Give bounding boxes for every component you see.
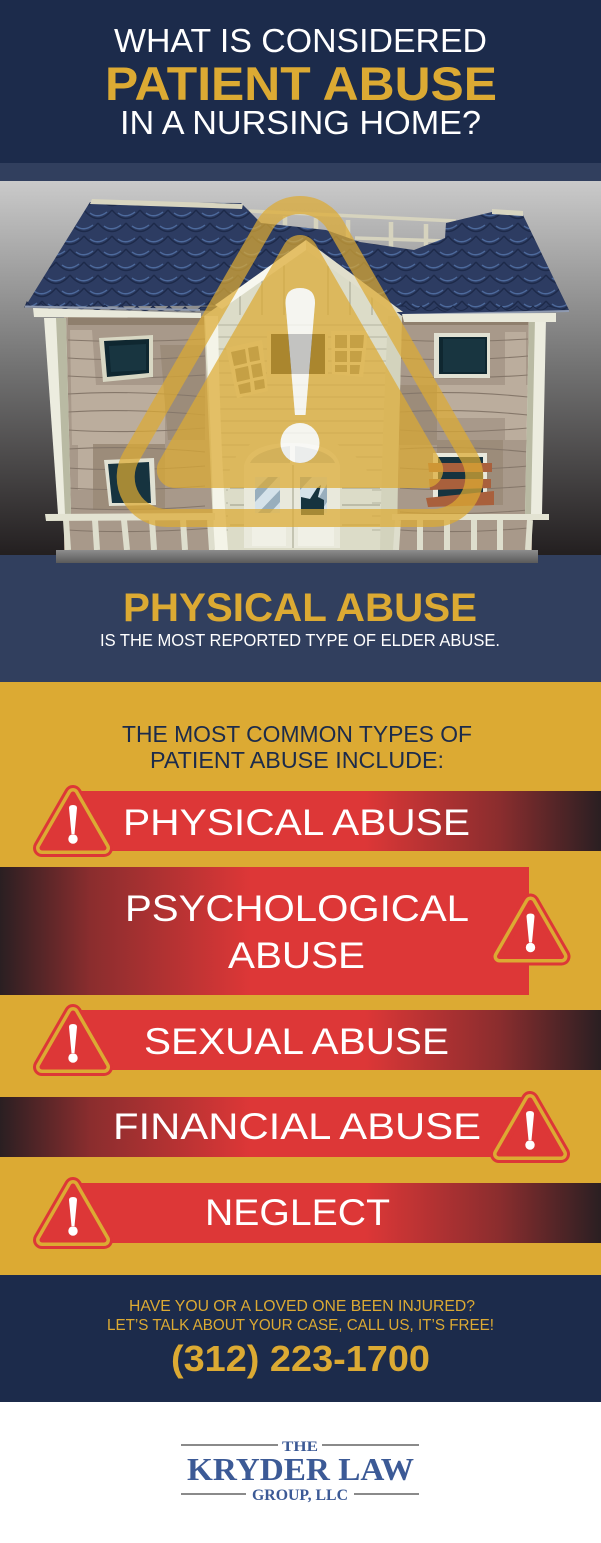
- title: WHAT IS CONSIDERED: [114, 22, 487, 59]
- logo: The Kryder Law Group: [181, 1439, 419, 1504]
- call to action text: [107, 1298, 494, 1334]
- porch balusters: [66, 520, 530, 550]
- call to action text: HAVE YOU OR A LOVED ONE BEEN INJURED?: [129, 1298, 475, 1315]
- logo: The Kryder Law Group: THE: [282, 1439, 318, 1455]
- title: PATIENT ABUSE: [105, 57, 497, 110]
- roof: [25, 199, 569, 315]
- banner: psychological abuse: ABUSE: [228, 934, 365, 976]
- banner: neglect: NEGLECT: [205, 1191, 390, 1233]
- central facade: [204, 240, 403, 550]
- icon: warning triangle: [42, 794, 104, 848]
- panel: physical abuse statistic: [0, 555, 601, 682]
- panel: types of abuse: [0, 682, 601, 1275]
- banner: sexual abuse: SEXUAL ABUSE: [144, 1020, 449, 1062]
- icon: warning triangle: [499, 1100, 561, 1154]
- panel: physical abuse statistic: PHYSICAL ABUSE: [123, 586, 477, 630]
- banner: psychological abuse: PSYCHOLOGICAL: [125, 887, 469, 929]
- lower left window: [104, 458, 156, 506]
- section heading: [122, 721, 472, 773]
- title: [105, 22, 497, 141]
- icon: warning triangle: [42, 1186, 104, 1240]
- banner: financial abuse: FINANCIAL ABUSE: [113, 1105, 481, 1147]
- upper windows: [99, 331, 490, 398]
- call to action text: LET’S TALK ABOUT YOUR CASE, CALL US, IT’S FREE!: [107, 1317, 494, 1334]
- porch columns: [33, 308, 556, 514]
- panel: header: [0, 0, 601, 163]
- porch railing: [45, 513, 549, 521]
- panel: physical abuse statistic: IS THE MOST REPORTED TYPE OF ELDER ABUSE.: [100, 630, 500, 650]
- panel: footer logo: [0, 1402, 601, 1543]
- section heading: THE MOST COMMON TYPES OF: [122, 721, 472, 747]
- logo: The Kryder Law Group: GROUP, LLC: [252, 1487, 348, 1504]
- section heading: PATIENT ABUSE INCLUDE:: [150, 747, 444, 773]
- banner: neglect: [42, 1183, 601, 1243]
- icon: warning triangle: [42, 1013, 104, 1067]
- exposed roof beams: [249, 211, 456, 252]
- banner: physical abuse: [42, 791, 601, 851]
- boarded lower right window: [426, 453, 494, 507]
- porch base: [56, 550, 538, 563]
- right wall: [392, 316, 532, 550]
- icon: warning triangle: [500, 902, 562, 956]
- panel: call to action: [0, 1275, 601, 1402]
- banner: financial abuse: [0, 1097, 561, 1157]
- banner: physical abuse: PHYSICAL ABUSE: [123, 801, 470, 843]
- warning ring: [126, 205, 474, 518]
- warning triangle: [157, 235, 443, 488]
- illustration: damaged house with warning sign: [0, 181, 601, 563]
- logo: The Kryder Law Group: KRYDER LAW: [187, 1451, 414, 1487]
- exclamation mark: [280, 288, 320, 463]
- title: IN A NURSING HOME?: [120, 104, 481, 141]
- phone number: (312) 223-1700: [171, 1338, 430, 1379]
- left wall: [64, 316, 216, 550]
- banner: psychological abuse: [0, 867, 562, 995]
- front door: [228, 436, 380, 550]
- banner: sexual abuse: [42, 1010, 601, 1070]
- warning sign overlay: [126, 205, 474, 518]
